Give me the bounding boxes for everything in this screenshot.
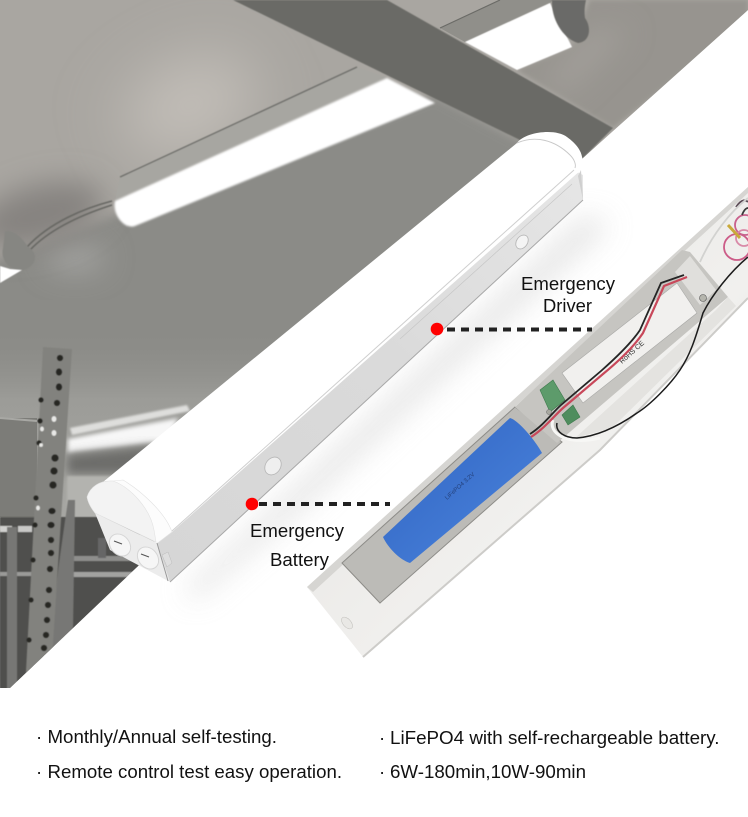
green terminals <box>540 380 565 412</box>
end cap top <box>517 139 575 168</box>
driver recess <box>515 250 728 443</box>
warehouse wall <box>66 475 154 542</box>
lamp bright bar <box>115 78 435 227</box>
end cap plate <box>95 513 170 582</box>
feature list: right column <box>379 727 720 782</box>
battery <box>383 418 542 563</box>
product: opened fixture interior: RoHS CE <box>619 340 646 365</box>
wire <box>27 201 112 250</box>
feature list: right column: 6W-180min,10W-90min <box>390 761 586 782</box>
ceiling beam <box>233 0 613 158</box>
warehouse ceiling light <box>70 405 190 435</box>
warehouse far wall <box>0 378 229 530</box>
dark fitting left <box>2 236 32 262</box>
dark fitting top right <box>552 0 589 43</box>
product: opened fixture interior: LiFePO4 3.2V <box>444 472 476 501</box>
battery recess <box>342 407 562 603</box>
output wire <box>552 420 600 440</box>
side panel <box>155 170 583 582</box>
callout: emergency driver <box>431 273 616 335</box>
feature list: right column: · <box>379 727 385 748</box>
lamp left bar <box>0 266 22 283</box>
lamp housing beyond the beam <box>440 0 553 42</box>
product: LED batten fixture <box>87 132 583 582</box>
feature list: left column: · <box>36 726 42 747</box>
feature list: left column: Monthly/Annual self-testing. <box>48 726 277 747</box>
mounting screws <box>546 410 552 414</box>
ceiling right of beam <box>517 0 748 128</box>
callout: emergency battery: Emergency <box>250 520 345 541</box>
end cap buttons <box>105 530 135 560</box>
lamp bar beyond the beam <box>465 3 572 70</box>
driver box <box>562 283 697 403</box>
end cap band <box>103 480 172 545</box>
feature list: left column: Remote control test easy operation. <box>48 761 342 782</box>
end cap dome <box>87 481 156 542</box>
diffuser <box>103 132 583 532</box>
shelving <box>0 500 152 690</box>
callout: emergency driver: Driver <box>543 295 592 316</box>
panel buttons <box>261 454 285 478</box>
feature list: left column: · <box>36 761 42 782</box>
feature list: right column: LiFePO4 with self-rechargeable battery. <box>390 727 720 748</box>
callout: emergency battery: Battery <box>270 549 330 570</box>
lamp housing <box>150 113 262 170</box>
warehouse dark band <box>67 445 160 474</box>
product: opened fixture interior <box>307 187 748 657</box>
callout: emergency battery <box>246 498 390 570</box>
clip <box>162 552 172 567</box>
shelf upright column <box>25 347 72 690</box>
callout: emergency driver: Emergency <box>521 273 616 294</box>
end screw notch <box>339 615 355 631</box>
shadow under fixture <box>185 215 610 600</box>
battery wires <box>531 277 687 437</box>
lamp shadow <box>0 172 108 254</box>
ceiling below lamp <box>0 95 520 682</box>
wiring bundle <box>700 198 748 262</box>
feature list: right column: · <box>379 761 385 782</box>
tray <box>307 187 748 657</box>
storage box <box>0 418 37 517</box>
feature list: left column <box>36 726 342 782</box>
